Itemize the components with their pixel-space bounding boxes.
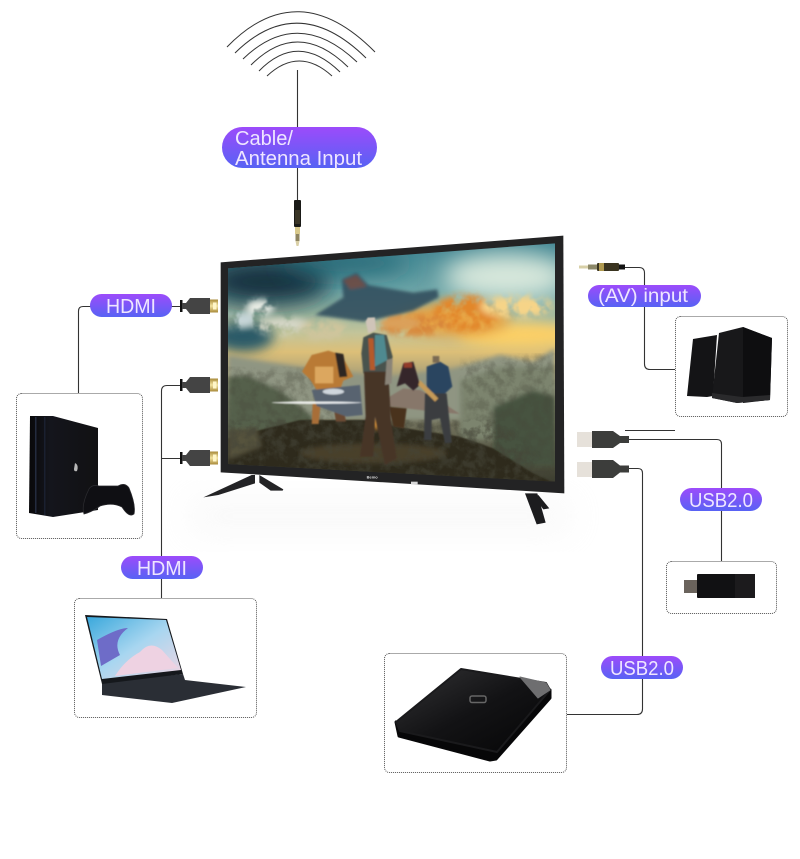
- hdmi connector 3: [180, 450, 218, 466]
- panel: game console: [16, 394, 142, 538]
- tv stand right: [525, 493, 549, 524]
- muzzle flare: [272, 401, 362, 404]
- flying ship: [387, 388, 460, 414]
- panel: hard drive: [384, 654, 566, 772]
- tv screen artwork: [228, 244, 555, 482]
- cable: laptop to hdmi: [162, 386, 180, 598]
- label: HDMI top: HDMI: [106, 296, 156, 318]
- icon: controller: [83, 484, 134, 515]
- hdmi connector 2: [180, 377, 218, 393]
- icon: laptop: [85, 615, 246, 703]
- right robots: [397, 356, 452, 443]
- main character: [360, 317, 397, 465]
- cable: hard drive to usb: [567, 468, 642, 714]
- tv bezel: [221, 236, 564, 493]
- antenna cable: [296, 70, 298, 200]
- icon: flash drive: [684, 574, 755, 598]
- icon: speakers: [687, 327, 772, 403]
- hdmi connector 1: [180, 298, 218, 314]
- antenna signal arcs: [227, 12, 375, 76]
- panel: speakers: [676, 316, 788, 416]
- icon: console: [29, 416, 98, 517]
- decorative stub line: [625, 430, 675, 432]
- label: Cable/Antenna Input: Antenna Input: [235, 148, 362, 170]
- tv stand left: [203, 475, 283, 497]
- label: USB2.0 lower: USB2.0: [610, 658, 674, 680]
- icon: hard drive: [396, 669, 550, 760]
- label: (AV) input: (AV) input: [598, 286, 689, 307]
- cable: speakers to av: [625, 268, 675, 370]
- cable: flash drive to usb: [629, 440, 722, 561]
- cable: console to hdmi: [78, 306, 180, 393]
- floor shadow: [190, 500, 570, 532]
- label: USB2.0 upper: USB2.0: [689, 490, 753, 512]
- label: HDMI bottom: HDMI: [137, 558, 187, 580]
- label: Cable/Antenna Input: [222, 127, 377, 170]
- foreground hill: [228, 420, 555, 483]
- panel: flash drive: [666, 562, 776, 614]
- tv indicator: [411, 482, 418, 484]
- label: HDMI bottom: [121, 556, 203, 580]
- television: [203, 236, 577, 524]
- floating mountain: [315, 273, 439, 322]
- label: HDMI top: [90, 294, 172, 318]
- antenna jack plug: [294, 200, 301, 246]
- distant mountains: [228, 348, 555, 467]
- label: Cable/Antenna Input: Cable/: [235, 128, 293, 150]
- av jack: [579, 263, 625, 271]
- left orange robot: [302, 351, 363, 424]
- tv logo: Bemo: [367, 475, 378, 480]
- usb connector 1: [577, 431, 629, 448]
- clouds: [227, 295, 553, 341]
- panel: laptop: [74, 598, 256, 718]
- usb connector 2: [577, 460, 629, 478]
